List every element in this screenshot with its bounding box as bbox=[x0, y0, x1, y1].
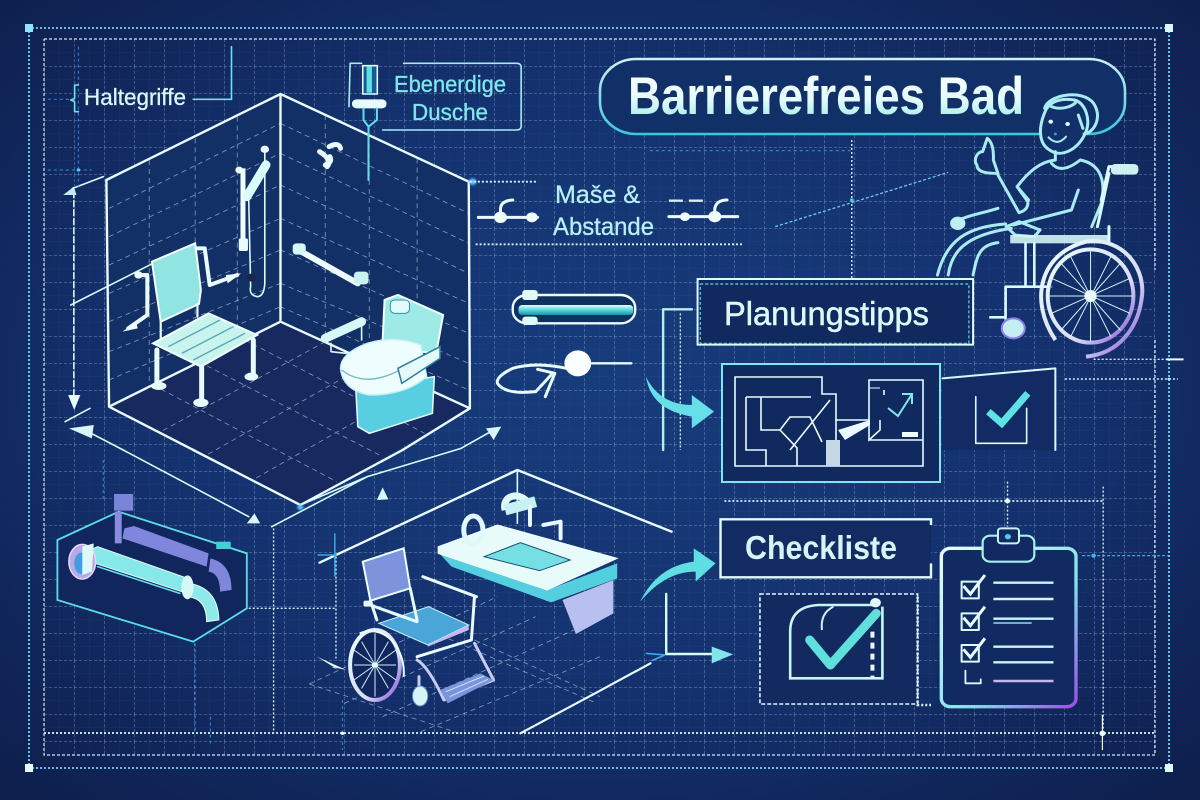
icon: grab bar horizontal bbox=[513, 290, 635, 325]
icon: diagonal grab bar bbox=[293, 243, 368, 284]
label: Haltegriffe: Haltegriffe bbox=[84, 84, 186, 110]
person in wheelchair bbox=[937, 95, 1142, 357]
label: Masse und Abstaende bbox=[553, 181, 654, 241]
panel: check box bbox=[942, 368, 1055, 450]
thumbs-up hand bbox=[975, 138, 998, 173]
room floor bbox=[109, 322, 470, 505]
cyan pipe bbox=[69, 543, 219, 622]
caster bbox=[412, 686, 428, 706]
arrow to Checkliste bbox=[640, 548, 716, 602]
glow point bbox=[469, 178, 476, 185]
wheel bbox=[350, 630, 400, 700]
room walls bbox=[106, 94, 470, 408]
legs bbox=[157, 340, 253, 398]
label box: Ebenerdige Dusche bbox=[349, 63, 521, 180]
icon: big check bbox=[790, 598, 882, 678]
counter side bbox=[439, 553, 617, 602]
faucets bbox=[464, 516, 483, 544]
room outline bbox=[106, 94, 470, 450]
top dimension line bbox=[724, 482, 1168, 750]
backrest bbox=[363, 548, 410, 601]
seat bbox=[379, 607, 469, 645]
label: Masse und Abstaende: Abstande bbox=[553, 213, 654, 241]
label: Masse und Abstaende: Maše & bbox=[555, 181, 640, 209]
plan solid parts bbox=[826, 420, 918, 466]
icon: sink bbox=[438, 496, 617, 634]
lower right group bbox=[640, 482, 1168, 750]
accent dimension lines bbox=[600, 140, 948, 278]
dimension arrows bbox=[48, 47, 501, 450]
panel: Planungstipps bbox=[698, 279, 973, 345]
base bbox=[356, 377, 434, 433]
arm rests bbox=[365, 577, 476, 657]
seat back bbox=[152, 243, 201, 322]
floor tile lines bbox=[153, 340, 425, 482]
person body bbox=[998, 152, 1103, 227]
icon: toilet bbox=[325, 295, 443, 433]
side handle bbox=[325, 322, 362, 338]
Masse icon right bbox=[669, 200, 738, 222]
seat bbox=[153, 313, 257, 367]
room bbox=[106, 94, 476, 505]
icon: faucet on wall bbox=[320, 145, 341, 167]
legs bbox=[937, 208, 1011, 275]
big wheel bbox=[1041, 241, 1142, 357]
right side ticks bbox=[1065, 359, 1184, 380]
label: Planungstipps: Planungstipps bbox=[724, 295, 929, 332]
cistern bbox=[383, 295, 443, 353]
front dimension lines bbox=[123, 448, 461, 733]
label: Ebenerdige Dusche text bbox=[394, 71, 506, 125]
basin bbox=[484, 543, 570, 571]
icon: check bbox=[976, 397, 1027, 443]
icon: curved arrow to knob bbox=[497, 350, 631, 397]
panel: floor plan bbox=[722, 364, 940, 482]
top-left quadrant, coordinates scaled bbox=[48, 47, 635, 505]
icon: wall grab bar with shower rail bbox=[235, 146, 269, 297]
icon: shower bbox=[352, 66, 386, 180]
pedestal bbox=[562, 580, 613, 634]
foot rest bbox=[417, 643, 494, 700]
hand on armrest bbox=[1006, 222, 1040, 237]
bottom lower group: left bbox=[57, 448, 672, 750]
clipboard bbox=[941, 528, 1076, 707]
clip bbox=[983, 528, 1034, 562]
armrest bbox=[1010, 235, 1110, 243]
floor plan drawing bbox=[735, 377, 923, 466]
icon: shower seat bbox=[122, 243, 258, 407]
label: Ebenerdige Dusche text: Ebenerdige bbox=[394, 71, 506, 97]
wheelchair frame bbox=[990, 164, 1138, 338]
panel: check frame bbox=[760, 594, 931, 705]
panel: Checkliste bbox=[721, 519, 931, 577]
bowl bbox=[341, 340, 427, 395]
curved arrow bbox=[646, 377, 714, 428]
label: Haltegriffe bracket bbox=[71, 47, 232, 112]
heading: Barrierefreies Bad: Barrierefreies Bad bbox=[628, 67, 1024, 126]
icon: hexagon grab bar panel bbox=[57, 494, 247, 642]
Masse icon left bbox=[478, 200, 538, 223]
icon: wheelchair bbox=[350, 548, 494, 706]
connector to floor plan bbox=[663, 309, 692, 450]
person head bbox=[1040, 95, 1097, 153]
back supports bbox=[161, 304, 197, 340]
lower room bbox=[309, 470, 672, 733]
arrow to check box bbox=[646, 594, 733, 663]
side rails bbox=[128, 248, 237, 328]
arm rest bbox=[398, 347, 440, 383]
title pill bbox=[600, 59, 1125, 134]
checklist rows bbox=[962, 575, 1053, 683]
top-right quadrant bbox=[600, 59, 1184, 450]
dimension leader lines bbox=[470, 182, 600, 244]
label: Checkliste: Checkliste bbox=[745, 529, 897, 566]
small plan arrow bbox=[888, 394, 912, 416]
counter top bbox=[438, 525, 617, 590]
wall tile lines bbox=[109, 115, 469, 390]
label: Ebenerdige Dusche text: Dusche bbox=[412, 99, 488, 125]
purple bar bbox=[114, 494, 232, 592]
